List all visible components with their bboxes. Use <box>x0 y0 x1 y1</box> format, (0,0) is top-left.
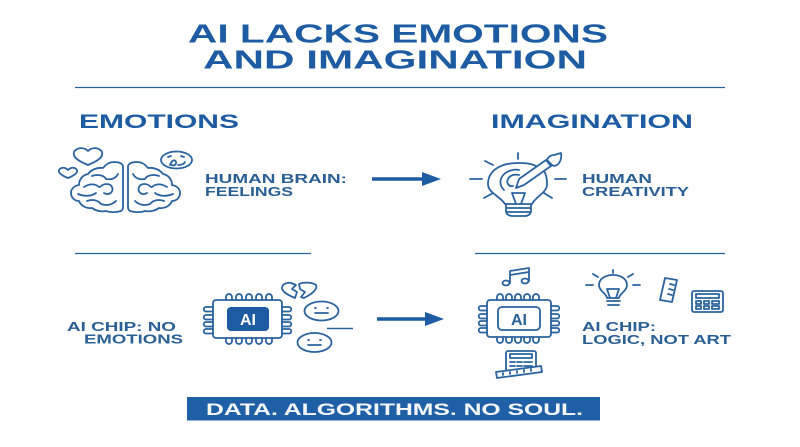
title: AI LACKS EMOTIONS <box>188 20 608 48</box>
icon: calculator lower and ruler <box>496 351 542 378</box>
title: AND IMAGINATION <box>203 46 587 74</box>
icon: music note <box>502 268 529 286</box>
icon: neutral face lower <box>298 333 332 352</box>
icon: small lightbulb <box>586 270 640 305</box>
banner <box>187 397 600 420</box>
icon: human brain with hearts and face <box>59 148 192 212</box>
icon: ai chip outlined <box>479 294 559 343</box>
icon: calculator upper <box>692 291 723 312</box>
icon: broken heart <box>282 283 316 298</box>
icon: neutral face upper <box>304 302 338 320</box>
label: human creativity: HUMAN <box>582 171 652 186</box>
icon: lightbulb with paintbrush <box>470 153 566 216</box>
label: ai chip logic not art: AI CHIP: <box>582 319 656 334</box>
label: human brain <box>205 171 347 199</box>
label: ai chip no emotions <box>67 319 183 346</box>
label: ai chip logic not art <box>582 319 731 347</box>
label: ai chip no emotions: EMOTIONS <box>84 332 183 346</box>
arrow: top <box>372 172 441 186</box>
title <box>188 20 608 74</box>
icon: ai chip outlined: AI <box>511 312 527 329</box>
icon: ruler <box>660 278 677 302</box>
banner: DATA. ALGORITHMS. NO SOUL. <box>206 401 583 419</box>
icon: ai chip with filled badge: AI <box>240 312 256 329</box>
label: human brain: FEELINGS <box>205 184 293 199</box>
label: ai chip no emotions: AI CHIP: NO <box>67 319 176 334</box>
label: human creativity: CREATIVITY <box>582 184 689 199</box>
label: human brain: HUMAN BRAIN: <box>205 171 347 186</box>
label: ai chip logic not art: LOGIC, NOT ART <box>582 332 731 347</box>
heading: imagination: IMAGINATION <box>491 111 693 133</box>
label: human creativity <box>582 171 689 199</box>
icon: ai chip with filled badge <box>204 294 291 344</box>
arrow: bottom <box>377 312 444 326</box>
heading: emotions: EMOTIONS <box>79 111 239 133</box>
